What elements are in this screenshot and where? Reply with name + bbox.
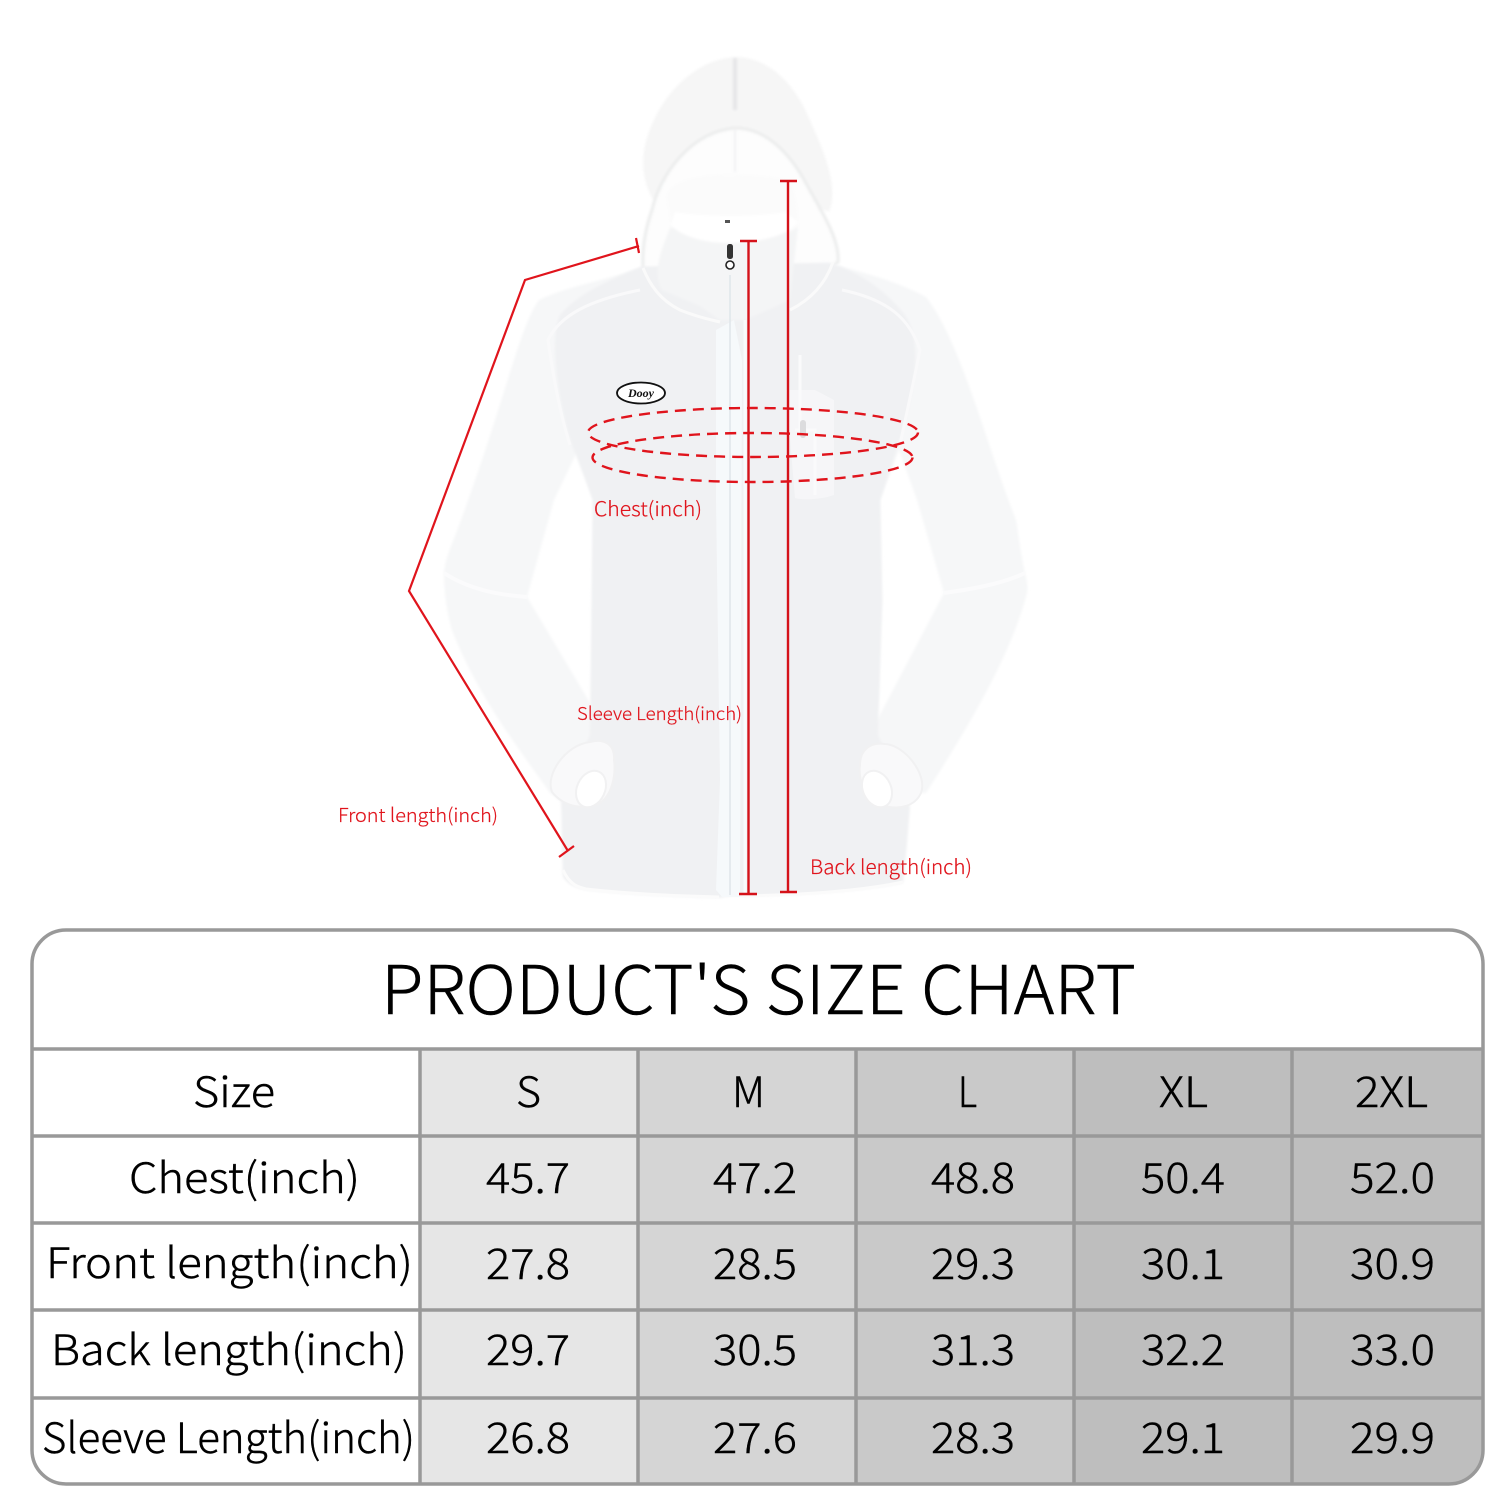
chest row: 48.8 — [931, 1145, 1015, 1206]
chest lower dashed ellipse — [592, 433, 912, 482]
back length row: 30.5 — [713, 1317, 797, 1378]
elbow seams — [444, 573, 1025, 597]
collar — [658, 175, 798, 320]
jacket sleeves and lower shell — [444, 263, 1028, 806]
back length row: 32.2 — [1141, 1317, 1225, 1378]
front length measure line — [409, 238, 639, 857]
back length measure line — [780, 181, 797, 892]
pocket zip — [795, 355, 815, 495]
sleeve length row — [42, 1405, 1435, 1466]
label: chest: Chest(inch) — [594, 493, 702, 522]
header row: Size — [193, 1059, 275, 1120]
sleeve length row: 29.9 — [1350, 1405, 1435, 1466]
header row: L — [958, 1059, 977, 1120]
hood seam at neck — [643, 262, 833, 322]
label: front length: Front length(inch) — [338, 801, 498, 828]
header row: M — [732, 1059, 765, 1120]
label: back length: Back length(inch) — [810, 851, 972, 880]
chest row — [129, 1145, 1435, 1206]
sleeve length row: 29.1 — [1141, 1405, 1225, 1466]
collar snap — [725, 220, 730, 223]
chest row: Chest(inch) — [129, 1145, 360, 1206]
hood — [643, 57, 838, 300]
size chart table — [32, 930, 1484, 1485]
back length row: Back length(inch) — [51, 1317, 407, 1378]
zipper pull — [726, 244, 734, 269]
raglan sleeve seams — [548, 290, 920, 445]
header row: S — [516, 1059, 541, 1120]
chest row: 50.4 — [1141, 1145, 1225, 1206]
chest row: 52.0 — [1350, 1145, 1435, 1206]
chest upper dashed ellipse — [588, 408, 918, 457]
front length row: 30.9 — [1350, 1231, 1435, 1292]
front length row — [46, 1230, 1435, 1292]
sleeve length row: 28.3 — [931, 1405, 1015, 1466]
cuffs — [551, 741, 922, 812]
front length row: 28.5 — [713, 1231, 797, 1292]
chest row: 47.2 — [713, 1145, 797, 1206]
table title: PRODUCT'S SIZE CHART — [381, 937, 1136, 1034]
front length row: 30.1 — [1141, 1231, 1225, 1292]
gaps between body and sleeves — [527, 450, 605, 728]
back length row: 33.0 — [1350, 1317, 1435, 1378]
jacket illustration — [444, 57, 1028, 898]
table outer border — [32, 930, 1483, 1484]
logo badge: Dooy — [627, 386, 655, 400]
label: sleeve length: Sleeve Length(inch) — [577, 700, 742, 726]
sleeve length row: 27.6 — [713, 1405, 797, 1466]
header row: 2XL — [1355, 1059, 1428, 1120]
jacket body — [555, 263, 915, 898]
sleeve length row: Sleeve Length(inch) — [42, 1405, 415, 1466]
back length row: 29.7 — [486, 1317, 570, 1378]
front length row: 27.8 — [486, 1231, 570, 1292]
sleeve length row: 26.8 — [486, 1405, 570, 1466]
front length row: Front length(inch) — [46, 1230, 413, 1291]
front length row: 29.3 — [931, 1231, 1015, 1292]
logo badge — [617, 382, 665, 404]
table background columns — [34, 1047, 1482, 1482]
header row — [193, 1059, 1428, 1120]
back length row — [51, 1317, 1435, 1378]
sleeve length measure line — [739, 241, 757, 894]
hem — [563, 870, 903, 897]
zipper placket — [716, 320, 742, 897]
header row: XL — [1159, 1059, 1208, 1120]
chest pocket — [786, 390, 834, 499]
chest row: 45.7 — [486, 1145, 570, 1206]
back length row: 31.3 — [931, 1317, 1015, 1378]
